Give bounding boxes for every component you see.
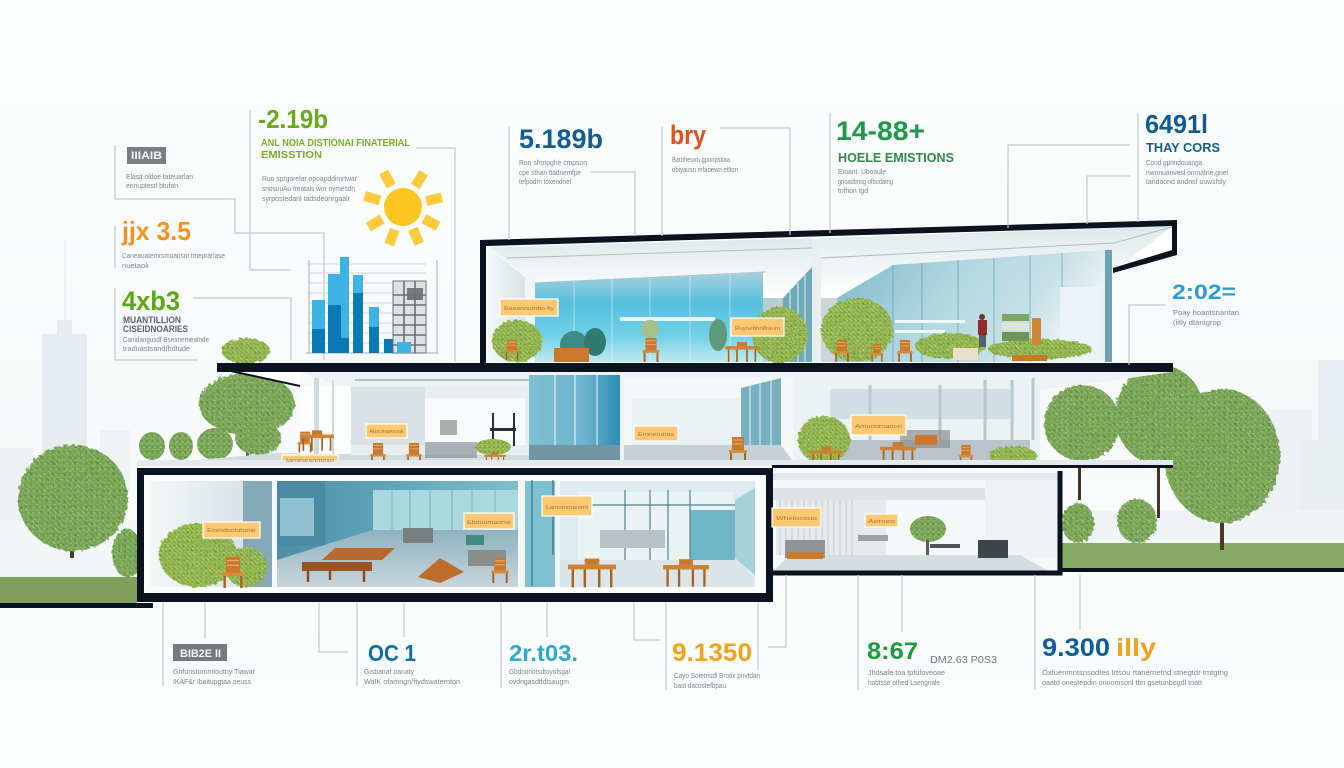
callout: bry (670, 120, 738, 174)
callout: orange stat: Caneauatemrsmoansnt tmeprarlase (122, 251, 225, 260)
floor 3 building section (480, 220, 1177, 364)
callout: that cors (1145, 109, 1228, 186)
callout: hole emissions: gnoadtmsg ofbodatng (838, 177, 893, 186)
text in room labels: Ruyoebhn8raum (735, 326, 780, 332)
text in room labels: Ebouumaome (467, 520, 511, 526)
callout: 5.189b: cpe sthan ttadnemfpe (519, 168, 581, 177)
callout: orange stat (121, 216, 225, 270)
floor 2 ceiling band (300, 372, 1172, 390)
floor 3 white shell (487, 226, 1173, 364)
text in room labels: Amuoomaoon (855, 424, 902, 430)
callout: orange stat: jjx 3.5 (121, 216, 191, 246)
bar chart (306, 257, 438, 353)
tree: upper terrace (199, 338, 295, 458)
connector lines (115, 110, 1165, 690)
callout: that cors: tandaond andnsf ouwsfsly (1146, 177, 1226, 186)
callout: hole emissions (836, 116, 954, 195)
white room (624, 372, 799, 464)
right room ceiling (821, 226, 1173, 298)
callout: 2r.03: Gbdoonotsdtoyofsgal (509, 667, 570, 676)
bushes right (1062, 499, 1157, 543)
text in room labels: Wheloosuo (776, 516, 817, 522)
furniture (785, 516, 1008, 559)
callout: 9.1350: 9.1350 (672, 639, 752, 667)
callout: orange stat: nuetaok (122, 261, 149, 270)
glass vestibule (520, 480, 560, 587)
central column (812, 239, 821, 362)
white interior frame (144, 475, 766, 593)
plants (492, 298, 1092, 363)
column (272, 481, 277, 587)
callout: 9.300 illy: 9.300 (1042, 634, 1110, 662)
callout: gray box top left: Elasit oldoe tateuarlan (126, 172, 193, 181)
callout: 5.189b (519, 124, 603, 186)
text in room labels: Atocmamook (369, 429, 404, 435)
callout: green 4x stat: 4xb3 (122, 286, 180, 316)
callout: green 4x stat: CISEIDNOARIES (123, 324, 188, 334)
person and planter shelf (978, 314, 1041, 347)
callout: 2:02: Poay hoantsnantan (1173, 308, 1239, 317)
text in room labels: Ecenduoiutome (207, 528, 256, 534)
top black frame (480, 220, 1177, 364)
callout: 8:67: DM2.63 P0S3 (930, 654, 997, 666)
trees right (1044, 365, 1280, 550)
callout: 2r.03: 2r.t03. (509, 640, 578, 666)
callout: gray box bottom left (173, 644, 255, 686)
bush by ground (112, 529, 142, 577)
callout: 2:02 (1172, 281, 1239, 327)
text in room labels: Eaeanoumbo fiy (504, 306, 554, 312)
callout: gray box top left (126, 147, 193, 190)
callout: 9.300 illy: oaatd onestepdin onoomsonl tbn gsetunbogdl toatt (1042, 678, 1203, 687)
callout: bry: bry (670, 120, 706, 150)
callout: 2r.03: ovdngasdtfdtsaugm (509, 677, 569, 686)
bright room (560, 481, 755, 587)
callout: 8:67 (867, 638, 997, 687)
callout: green 4x stat: Canidangusdf Bseanemeatnde (123, 335, 209, 344)
callout: 5.189b: tefpodm toxendnel (519, 177, 571, 186)
callout: 2r.03 (509, 640, 578, 686)
callout: 9.300 illy: Oxfuenmntsnsodtes Irtsou rtanernetnd stnegtdr tmtgtng (1042, 668, 1228, 677)
callout: green financial stat (258, 104, 410, 203)
callout: 8:67: Jhdsafe toa tpfufoveoae (868, 668, 945, 677)
chart grid (309, 264, 426, 343)
light bars (312, 257, 411, 353)
callout: 8:67: 8:67 (867, 638, 918, 665)
floor 1 right room (772, 471, 1060, 573)
callout: green financial stat: Ruo sprgorelar opoapddimrtwar (262, 174, 357, 183)
left room ceiling (489, 238, 812, 298)
callout: hole emissions: HOELE EMISTIONS (838, 150, 954, 165)
teal lounge room (277, 481, 518, 587)
callout: green financial stat: ANL NOIA DISTIONAI FINATERIAL (261, 138, 410, 149)
callout: bry: obiyausn mfaoewn etlton (672, 165, 738, 174)
callout: gray box bottom left: Ghfunstommtoutny Tiawar (173, 667, 255, 676)
right section (798, 378, 1040, 466)
callout: OC 1: Gisbanaf oanaty (364, 667, 414, 676)
dining furniture (568, 559, 709, 587)
left room side wall (488, 247, 525, 362)
callout: green financial stat: syrpostedanl tadsdeonrgaalr (262, 194, 350, 203)
dark bars (312, 293, 395, 353)
callout: green 4x stat: traduastsandfhdtude (123, 344, 190, 353)
left wall (150, 481, 245, 587)
callout: that cors: nwonuanvesl omnatne,gnel (1146, 168, 1228, 177)
callout: green financial stat: EMISSTION (261, 150, 322, 161)
callout: green 4x stat (122, 286, 209, 353)
background skyline right (1060, 360, 1344, 544)
text in room labels: Iamearsnmoso (286, 458, 334, 464)
glass room centre (529, 375, 620, 463)
tree: large left (18, 445, 128, 558)
callout: hole emissions: 14-88+ (836, 116, 925, 146)
grass strip left (0, 577, 153, 608)
frame (772, 471, 1060, 573)
callout: OC 1 (364, 640, 460, 686)
right room glass wall (821, 250, 1112, 362)
left open terrace (139, 368, 530, 466)
callout: OC 1: OC 1 (368, 640, 416, 666)
lounge furniture (302, 528, 509, 583)
callout: green financial stat: snosuuAu treatals wor oymesdn (262, 184, 355, 193)
text in room labels: Lamomoueomt (546, 505, 589, 511)
callout: 8:67: hobtsse othed Lsengnale (868, 678, 940, 687)
icon: sun (363, 170, 443, 246)
bush and chair (159, 523, 267, 588)
callout: 9.300 illy: illy (1116, 634, 1156, 662)
black frame (137, 468, 773, 602)
floor 2 furniture (298, 430, 973, 466)
tree: large right (1164, 389, 1280, 550)
text in room labels: Aeroeo (868, 519, 895, 525)
floor 2 slab (137, 460, 1173, 466)
left room glass wall (535, 267, 812, 362)
callout: that cors: Cond gpnndouanga. (1146, 158, 1204, 167)
room labels (203, 496, 592, 538)
callout: 5.189b: Ron shotpghe cmpson (519, 158, 587, 167)
room labels (282, 415, 906, 465)
callout: that cors: THAY CORS (1146, 140, 1220, 155)
callout: gray box bottom left: IKAF&r Ibaitupgtaa oeuss (173, 677, 251, 686)
callout: hole emissions: tnfhon tgd (838, 186, 868, 195)
callout: that cors: 6491l (1145, 109, 1208, 139)
callout: 2:02: (iitly dtantgrop (1173, 318, 1221, 327)
back wall panels (776, 480, 1058, 558)
callout: green financial stat: -2.19b (258, 104, 328, 134)
callout: 9.300 illy (1042, 634, 1228, 687)
mid black beam (217, 363, 1173, 372)
furniture (505, 338, 1047, 362)
trees left (18, 338, 295, 577)
callout: 9.1350: bast dacostefbpau (674, 681, 726, 690)
callout: gray box top left: IIIAIB (131, 150, 162, 162)
building infographic block (393, 281, 426, 353)
callout: 9.1350 (672, 639, 760, 690)
text in room labels: Eronenaras (638, 432, 674, 438)
callout: hole emissions: Etoant. Uboaule (838, 167, 886, 176)
room labels (500, 299, 784, 336)
callout: green 4x stat: MUANTILLION (123, 315, 181, 325)
callout: 2:02: 2:02= (1172, 281, 1236, 304)
callout: 5.189b: 5.189b (519, 124, 603, 154)
text in room labels (207, 306, 902, 534)
floor (773, 555, 1048, 571)
room labels (772, 508, 898, 527)
floor 1 building section (137, 468, 773, 602)
background skyline left (0, 240, 140, 580)
callout: OC 1: WaIK ofamngn/ftydswaternton (364, 677, 460, 686)
small trees row (139, 428, 233, 466)
grass strip right (1062, 543, 1344, 572)
slab thin black line (772, 465, 1173, 468)
tree: right cluster (1044, 365, 1205, 518)
left interior room (351, 380, 529, 458)
callout: bry: Batoheuxn gponpstiaa (672, 155, 731, 164)
callout: 9.1350: Cayo Sotetnsdl Brotix pnvtdan (674, 671, 760, 680)
callout: gray box bottom left: BIB2E II (180, 648, 221, 660)
callout: gray box top left: ennuptestl btufan (126, 181, 178, 190)
floor 2 building section (137, 363, 1173, 468)
